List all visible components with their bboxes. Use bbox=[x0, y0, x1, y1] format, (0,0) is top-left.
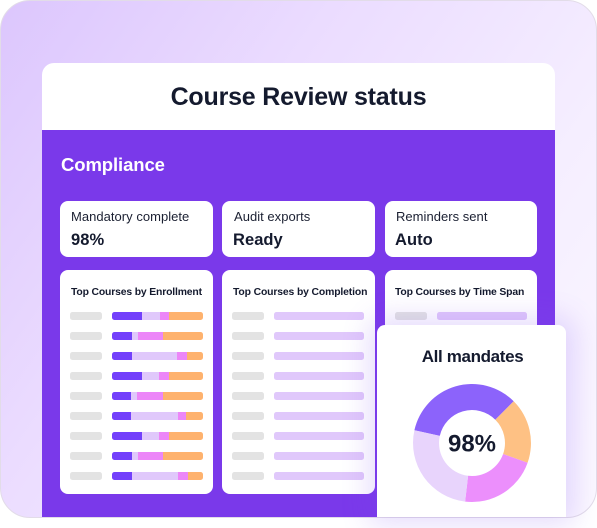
dashboard header bbox=[42, 63, 555, 130]
title: Course Review status bbox=[171, 83, 426, 111]
row list bbox=[395, 312, 527, 320]
label: Reminders sent bbox=[396, 209, 487, 224]
label: Mandatory complete bbox=[71, 209, 189, 224]
value: 98% bbox=[71, 231, 104, 249]
row list bbox=[70, 312, 203, 480]
value: Auto bbox=[395, 231, 433, 249]
panel: top courses by completion bbox=[222, 270, 375, 494]
value: Ready bbox=[233, 231, 283, 249]
heading: All mandates bbox=[422, 347, 523, 366]
heading: compliance: Compliance bbox=[61, 154, 165, 175]
donut segments bbox=[413, 384, 531, 502]
heading: Top Courses by Completion bbox=[233, 287, 367, 298]
center value: 98% bbox=[448, 430, 496, 458]
row list bbox=[232, 312, 364, 480]
purple compliance panel bbox=[42, 130, 555, 517]
stat card: mandatory complete bbox=[60, 201, 213, 257]
heading: Top Courses by Enrollment bbox=[71, 287, 202, 298]
heading: Top Courses by Time Span bbox=[395, 287, 524, 298]
panel: top courses by enrollment bbox=[60, 270, 213, 494]
floating card: all mandates bbox=[377, 325, 566, 517]
panel: top courses by time span bbox=[385, 270, 537, 494]
donut chart bbox=[413, 384, 531, 502]
stat card: reminders sent bbox=[385, 201, 537, 257]
stat card: audit exports bbox=[222, 201, 375, 257]
label: Audit exports bbox=[234, 209, 310, 224]
